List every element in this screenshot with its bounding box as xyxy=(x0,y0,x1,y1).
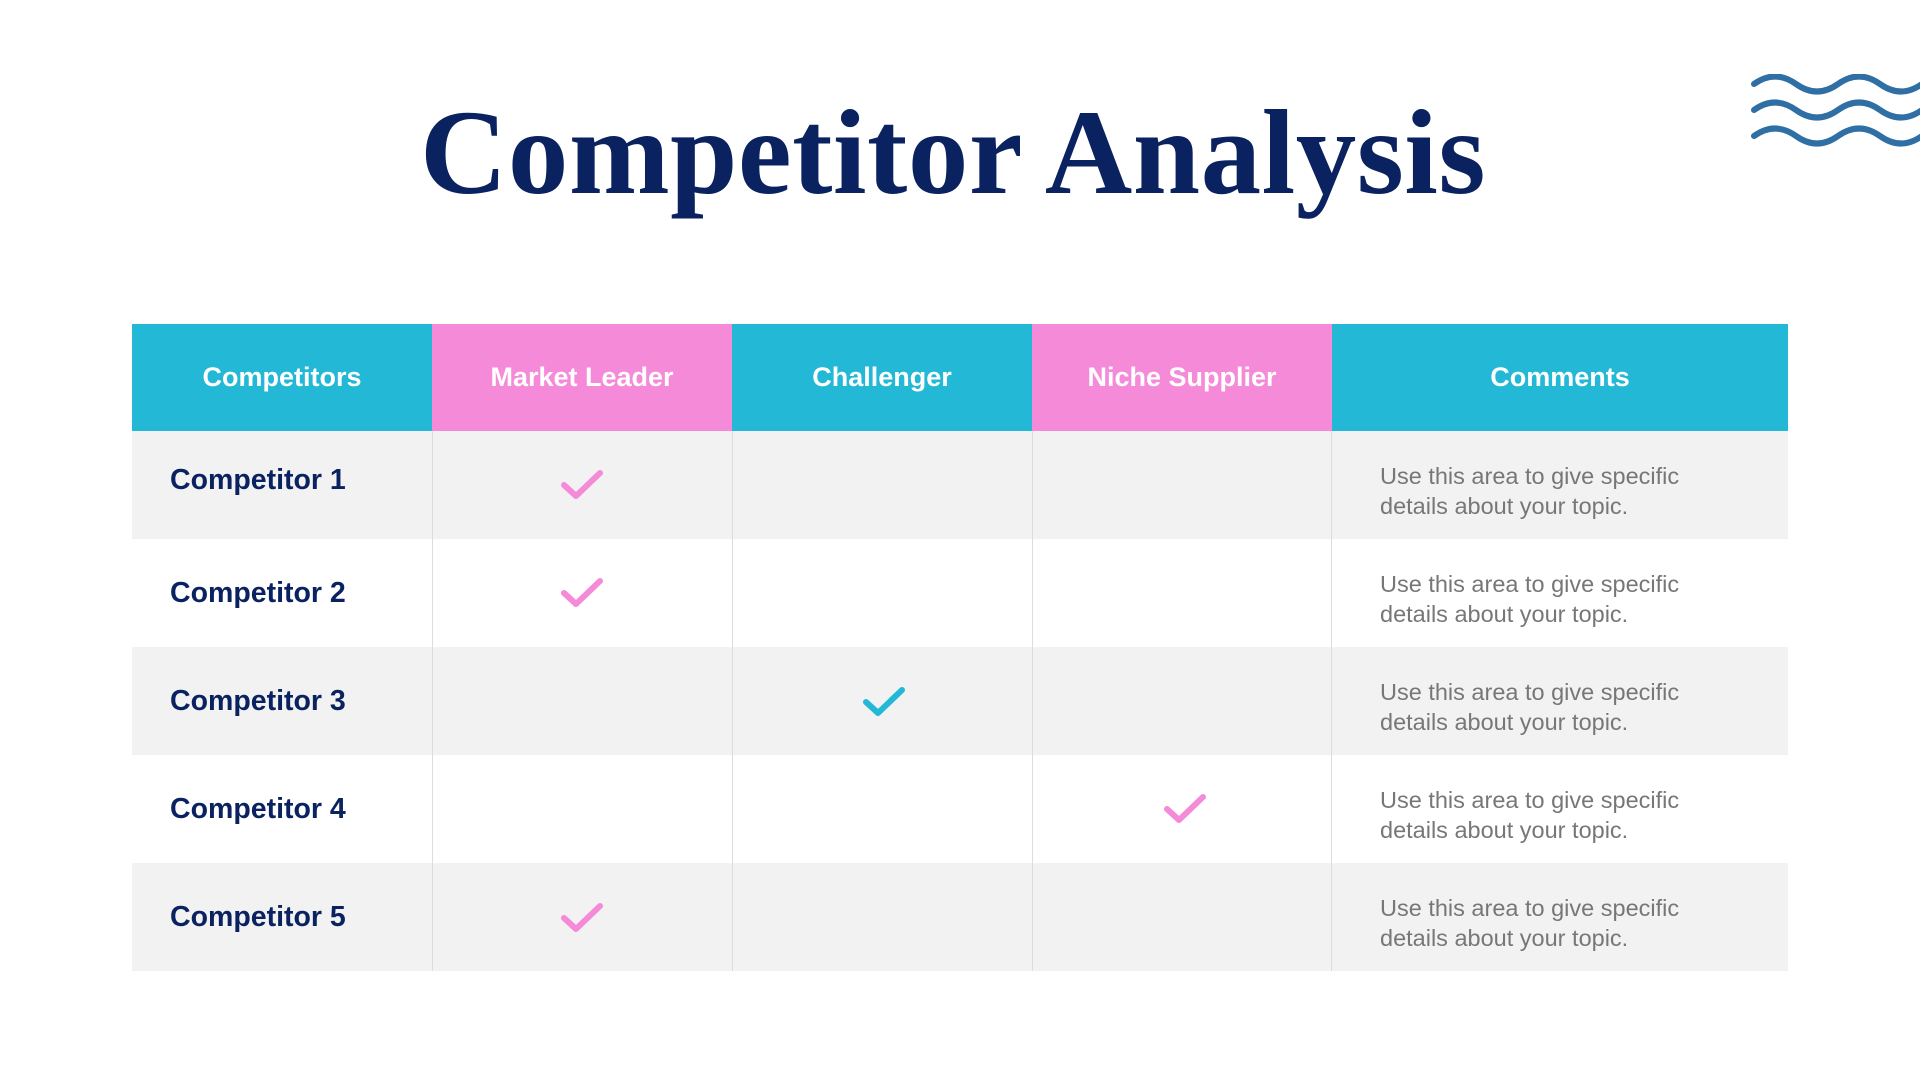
row 4: Use this area to give specific xyxy=(1380,787,1679,813)
row 5: details about your topic. xyxy=(1380,925,1628,951)
row 2: details about your topic. xyxy=(1380,601,1628,627)
row 1: details about your topic. xyxy=(1380,493,1628,519)
header: Competitors: Competitors xyxy=(202,362,362,392)
row 2 xyxy=(170,571,1679,627)
check: competitor 5 market leader xyxy=(561,903,603,932)
header: Comments: Comments xyxy=(1490,362,1630,392)
header: Competitors xyxy=(132,324,432,431)
check: competitor 4 niche supplier xyxy=(1164,794,1206,823)
row 3: Use this area to give specific xyxy=(1380,679,1679,705)
header: Comments xyxy=(1332,324,1788,431)
check: competitor 1 market leader xyxy=(561,470,603,499)
row 2: Competitor 2 xyxy=(170,576,346,608)
check: competitor 2 market leader xyxy=(561,578,603,607)
row 5: Competitor 5 xyxy=(170,900,346,932)
header: Niche Supplier: Niche Supplier xyxy=(1087,362,1277,392)
header: Market Leader xyxy=(432,324,732,431)
table xyxy=(132,324,1788,971)
header: Challenger: Challenger xyxy=(812,362,952,392)
row 4: details about your topic. xyxy=(1380,817,1628,843)
header: Challenger xyxy=(732,324,1032,431)
row 1 xyxy=(132,431,1788,539)
row 4: Competitor 4 xyxy=(170,792,346,824)
row 5: Use this area to give specific xyxy=(1380,895,1679,921)
row 1: Competitor 1 xyxy=(170,464,346,496)
check: competitor 3 challenger xyxy=(863,687,905,716)
row 4 xyxy=(170,787,1679,843)
row 1: Use this area to give specific xyxy=(1380,463,1679,489)
header: Market Leader: Market Leader xyxy=(490,362,674,392)
row 2: Use this area to give specific xyxy=(1380,571,1679,597)
icon: waves xyxy=(1751,74,1920,147)
row 3 xyxy=(132,647,1788,755)
header: Niche Supplier xyxy=(1032,324,1332,431)
row 3: details about your topic. xyxy=(1380,709,1628,735)
row 5 xyxy=(132,863,1788,971)
row 3: Competitor 3 xyxy=(170,684,346,716)
title: Competitor Analysis xyxy=(420,86,1486,220)
